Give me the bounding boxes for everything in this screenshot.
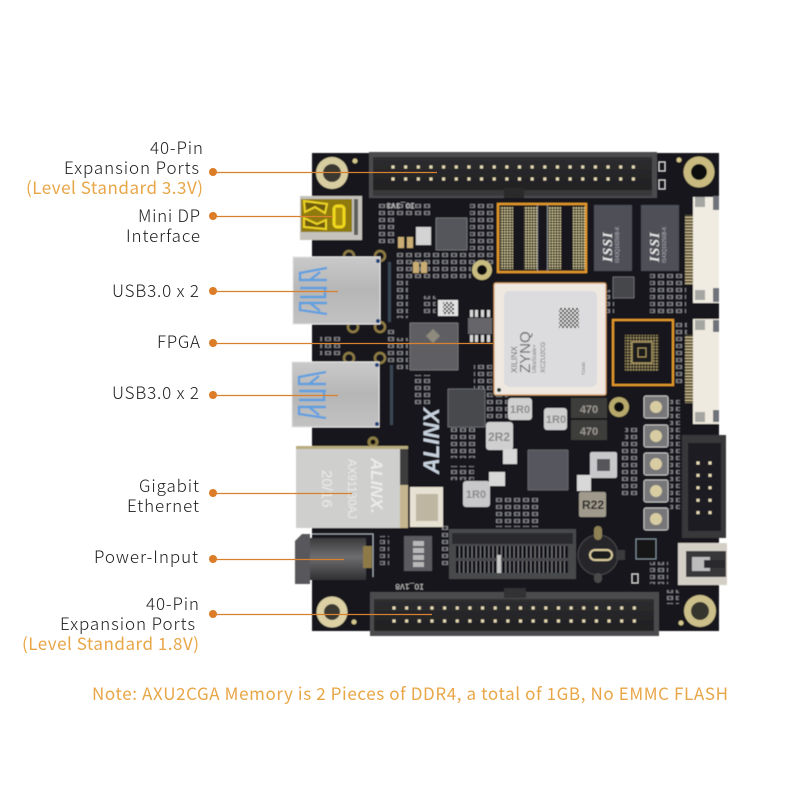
label text xyxy=(127,472,199,517)
power input barrel jack xyxy=(295,534,373,584)
leader line xyxy=(209,489,352,497)
small white power connector xyxy=(410,487,443,527)
label text: Interface xyxy=(126,222,200,247)
leader line xyxy=(209,610,432,618)
crystal block xyxy=(416,227,431,245)
leader line xyxy=(209,339,493,347)
mini USB connector xyxy=(678,543,727,585)
inductor 1R0 top: 1R0 xyxy=(510,404,530,416)
FPGA chip xyxy=(494,283,606,395)
label text: Expansion Ports xyxy=(64,154,199,179)
label text: Power-Input xyxy=(94,543,198,568)
mounting hole: above ethernet xyxy=(368,436,378,448)
mounting hole: right of FPGA xyxy=(609,397,629,417)
button 4 xyxy=(644,480,668,502)
leader line xyxy=(209,168,437,176)
capacitor 470 top xyxy=(571,398,607,418)
jack brand: ALINX. xyxy=(367,457,386,514)
mounting hole: top left xyxy=(316,157,348,189)
inductor 2R2 xyxy=(486,422,513,450)
callout: mini DP xyxy=(126,202,333,247)
coin cell holder xyxy=(578,526,625,583)
eMMC pads, highlighted xyxy=(613,320,673,385)
Xilinx logo text: XILINX xyxy=(509,346,519,373)
inductor near power chip xyxy=(590,452,617,478)
callout: 40-pin 1.8V xyxy=(22,590,432,655)
inductor 2R2: 2R2 xyxy=(488,430,510,444)
capacitor 470 lower xyxy=(571,420,607,440)
square pad xyxy=(636,539,656,559)
USB3.0 connector: lower xyxy=(292,362,393,427)
chip marking right: ISSI xyxy=(648,232,663,263)
SMD component clusters xyxy=(320,202,687,604)
callout: USB lower xyxy=(112,379,338,404)
mounting hole: bottom right xyxy=(684,595,716,627)
USB3.0 connector: upper xyxy=(293,257,391,324)
JTAG box header xyxy=(682,435,726,538)
label text xyxy=(26,134,203,199)
bottom 40-pin header xyxy=(370,588,659,636)
top 40-pin header xyxy=(369,152,657,198)
label text xyxy=(22,590,199,655)
callout: FPGA xyxy=(157,328,493,353)
chip marking left: ISSI xyxy=(601,232,616,263)
small IC: upper left xyxy=(436,218,467,250)
part number: XCZU2CG xyxy=(540,342,547,373)
label text: 40-Pin xyxy=(150,134,203,159)
mini DP connector xyxy=(300,196,362,240)
small white passives xyxy=(489,449,591,491)
label text: (Level Standard 3.3V) xyxy=(26,174,203,199)
Ultrascale text: UltraScale+ xyxy=(532,344,538,373)
central controller chip xyxy=(410,323,458,370)
QR marking xyxy=(559,308,579,328)
tactile buttons xyxy=(644,396,668,530)
inductor R22 xyxy=(579,492,606,517)
gold capacitors xyxy=(398,237,427,273)
mounting hole: centre xyxy=(472,260,492,280)
8-pin chip near FPGA xyxy=(468,310,492,342)
leader line xyxy=(209,555,344,563)
label text: Gigabit xyxy=(139,472,199,497)
small IC: upper right xyxy=(613,277,634,298)
mounting hole: bottom left xyxy=(316,596,348,628)
jack part number: AX91130AJ xyxy=(345,459,357,519)
capacitor 470 lower: 470 xyxy=(580,426,598,438)
gold via rings around USB xyxy=(344,251,385,363)
inductor 1R0 lower: 1R0 xyxy=(466,489,486,501)
label text: 40-Pin xyxy=(146,590,199,615)
inductor 1R0 lower xyxy=(463,481,490,507)
label text: Ethernet xyxy=(127,492,199,517)
silk marks near headers xyxy=(632,162,665,583)
inductors xyxy=(463,398,617,517)
button 5 xyxy=(644,508,668,530)
right FPC connector: lower xyxy=(685,319,719,424)
lot marking: T2446 xyxy=(581,362,586,375)
IC below controller xyxy=(448,389,485,427)
label text: FPGA xyxy=(157,328,200,353)
label text: (Level Standard 1.8V) xyxy=(22,630,199,655)
inductor 1R0 middle xyxy=(544,408,567,430)
leader line xyxy=(209,212,333,220)
label text: USB3.0 x 2 xyxy=(112,277,199,302)
silk label IO_1V8: IO_1V8 xyxy=(395,581,424,590)
DDR4 memory pads, highlighted xyxy=(498,204,586,272)
callout: power input xyxy=(94,543,344,568)
Zynq logo text: ZYNQ xyxy=(517,331,534,373)
button 1 xyxy=(644,396,668,418)
note text: Note: AXU2CGA Memory is 2 Pieces of DDR4, a total of 1GB, No EMMC FLASH xyxy=(92,680,728,705)
inductor 1R0 top xyxy=(508,398,532,420)
capacitor 470 top: 470 xyxy=(580,404,598,416)
inductor R22: R22 xyxy=(582,498,604,512)
mounting hole: top right xyxy=(684,156,714,188)
callout: gigabit ethernet xyxy=(127,472,352,517)
callout: USB upper xyxy=(112,277,338,302)
label text: Mini DP xyxy=(138,202,200,227)
right FPC connector: upper xyxy=(685,196,719,303)
chip code right: IS43Q16256B-K xyxy=(662,226,668,263)
marked square chip xyxy=(438,300,458,316)
circuit board xyxy=(292,152,727,636)
label text: Expansion Ports xyxy=(60,610,195,635)
gigabit ethernet jack xyxy=(296,446,408,528)
ALINX silk-screen logo: ALINX xyxy=(419,407,444,475)
button 2 xyxy=(644,425,668,447)
button 3 xyxy=(644,453,668,475)
leader line xyxy=(209,391,338,399)
label text xyxy=(126,202,200,247)
leader line xyxy=(209,287,338,295)
board substrate xyxy=(312,153,719,631)
jack date code: 20/16 xyxy=(318,470,335,508)
ISSI memory chips xyxy=(594,205,679,271)
chip code left: IS43Q16256B-K xyxy=(615,226,621,263)
DIP switch xyxy=(404,536,432,571)
PCIe slot xyxy=(449,529,576,579)
silk label IO_3V3: IO_3V3 xyxy=(386,200,415,209)
solder dots xyxy=(352,158,684,626)
label text: USB3.0 x 2 xyxy=(112,379,199,404)
inductor 1R0 middle: 1R0 xyxy=(546,414,566,426)
power management chip xyxy=(528,450,568,490)
callout: 40-pin 3.3V xyxy=(26,134,437,199)
